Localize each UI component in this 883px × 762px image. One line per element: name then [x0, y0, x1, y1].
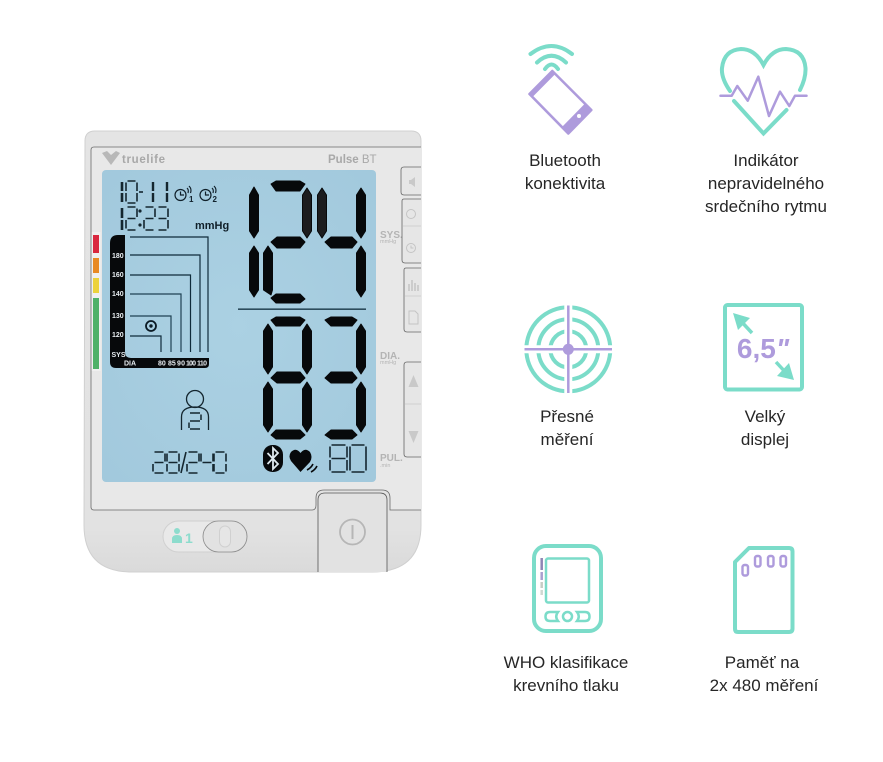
label PUL: PUL.	[380, 453, 403, 464]
user switch	[163, 521, 247, 552]
diastolic scale: 90	[177, 360, 185, 368]
label: krevního tlaku	[513, 676, 619, 695]
memory counter 28/240	[153, 452, 226, 473]
alarm icon 2: 2	[212, 195, 218, 204]
alarm icon 2	[200, 186, 218, 204]
label: Přesné	[540, 407, 594, 426]
label: konektivita	[525, 174, 606, 193]
label: Bluetooth	[529, 151, 601, 170]
label: nepravidelného	[708, 174, 824, 193]
label PUL: .min	[380, 463, 390, 469]
diastolic scale: 80	[158, 360, 166, 368]
arrow up-left	[733, 313, 752, 333]
feature: memory	[710, 548, 819, 695]
classification lines	[130, 237, 208, 352]
systolic scale	[112, 253, 126, 359]
blood pressure monitor device	[84, 131, 421, 572]
feature: accurate measurement	[522, 303, 615, 449]
risk colour bar	[92, 232, 100, 371]
time 12:23	[122, 207, 168, 230]
systolic scale: 180	[112, 253, 124, 260]
systolic scale: 130	[112, 313, 124, 320]
alarm icon 1	[175, 186, 194, 204]
target marker	[146, 321, 156, 331]
truelife logo: truelife	[122, 154, 165, 166]
date 10-11	[122, 181, 167, 203]
systolic scale: 140	[112, 291, 124, 298]
icon: memory card	[735, 548, 792, 632]
label: měření	[541, 430, 594, 449]
chart frame	[110, 235, 209, 368]
label: 2x 480 měření	[710, 676, 819, 695]
diastolic scale: 85	[168, 360, 176, 368]
systolic scale: 120	[112, 332, 124, 339]
feature: WHO classification	[504, 546, 628, 695]
power button	[318, 493, 387, 572]
sound button	[401, 167, 421, 195]
model name: Pulse BT	[328, 154, 377, 166]
alarm icon 1: 1	[189, 195, 194, 204]
panel edge line	[91, 147, 421, 510]
label DIA: DIA.	[380, 351, 400, 362]
feature: Bluetooth	[525, 46, 606, 193]
label PUL	[380, 453, 403, 469]
label: WHO klasifikace	[504, 653, 628, 672]
label SYS: SYS.	[380, 230, 403, 241]
icon: 6.5 inch display	[725, 305, 802, 390]
label: Velký	[745, 407, 786, 426]
switch number: 1	[185, 530, 193, 546]
label DIA: mmHg	[380, 360, 396, 366]
truelife logo	[102, 151, 165, 166]
arrow buttons	[404, 362, 421, 457]
unit mmHg: mmHg	[195, 220, 229, 232]
diagonal value: 6,5"	[737, 333, 790, 364]
feature: large display	[725, 305, 802, 449]
WHO classification chart	[110, 235, 209, 368]
average and memory buttons	[404, 268, 421, 332]
icon: monitor	[534, 546, 601, 631]
diastolic reading 83	[264, 317, 366, 439]
irregular heartbeat symbol	[290, 450, 317, 472]
LCD screen	[102, 170, 376, 482]
switch knob	[203, 521, 247, 552]
pulse reading 80	[330, 445, 366, 472]
diastolic scale: DIA	[124, 360, 136, 368]
label: Indikátor	[733, 151, 799, 170]
icon: heart with pulse	[720, 49, 806, 134]
icon: phone with signal	[530, 46, 591, 134]
user icon with number 2	[182, 390, 208, 430]
label SYS: mmHg	[380, 239, 396, 245]
systolic scale: SYS	[112, 352, 126, 359]
label: srdečního rytmu	[705, 197, 827, 216]
diastolic scale	[124, 360, 207, 368]
diastolic scale: 110	[197, 360, 207, 368]
bluetooth symbol	[263, 445, 283, 472]
label: Paměť na	[725, 653, 800, 672]
device front panel outline	[91, 147, 421, 510]
systolic scale: 160	[112, 272, 124, 279]
arrow down-right	[776, 362, 794, 380]
switch user icon	[172, 528, 182, 543]
device body	[84, 131, 421, 572]
icon: target	[522, 303, 615, 396]
side buttons	[401, 167, 421, 457]
label: displej	[741, 430, 789, 449]
diastolic scale: 100	[186, 360, 196, 368]
systolic reading 124	[250, 181, 366, 303]
feature: irregular heartbeat	[705, 49, 827, 216]
reading divider	[238, 308, 366, 310]
alarm and clock buttons	[402, 199, 421, 263]
